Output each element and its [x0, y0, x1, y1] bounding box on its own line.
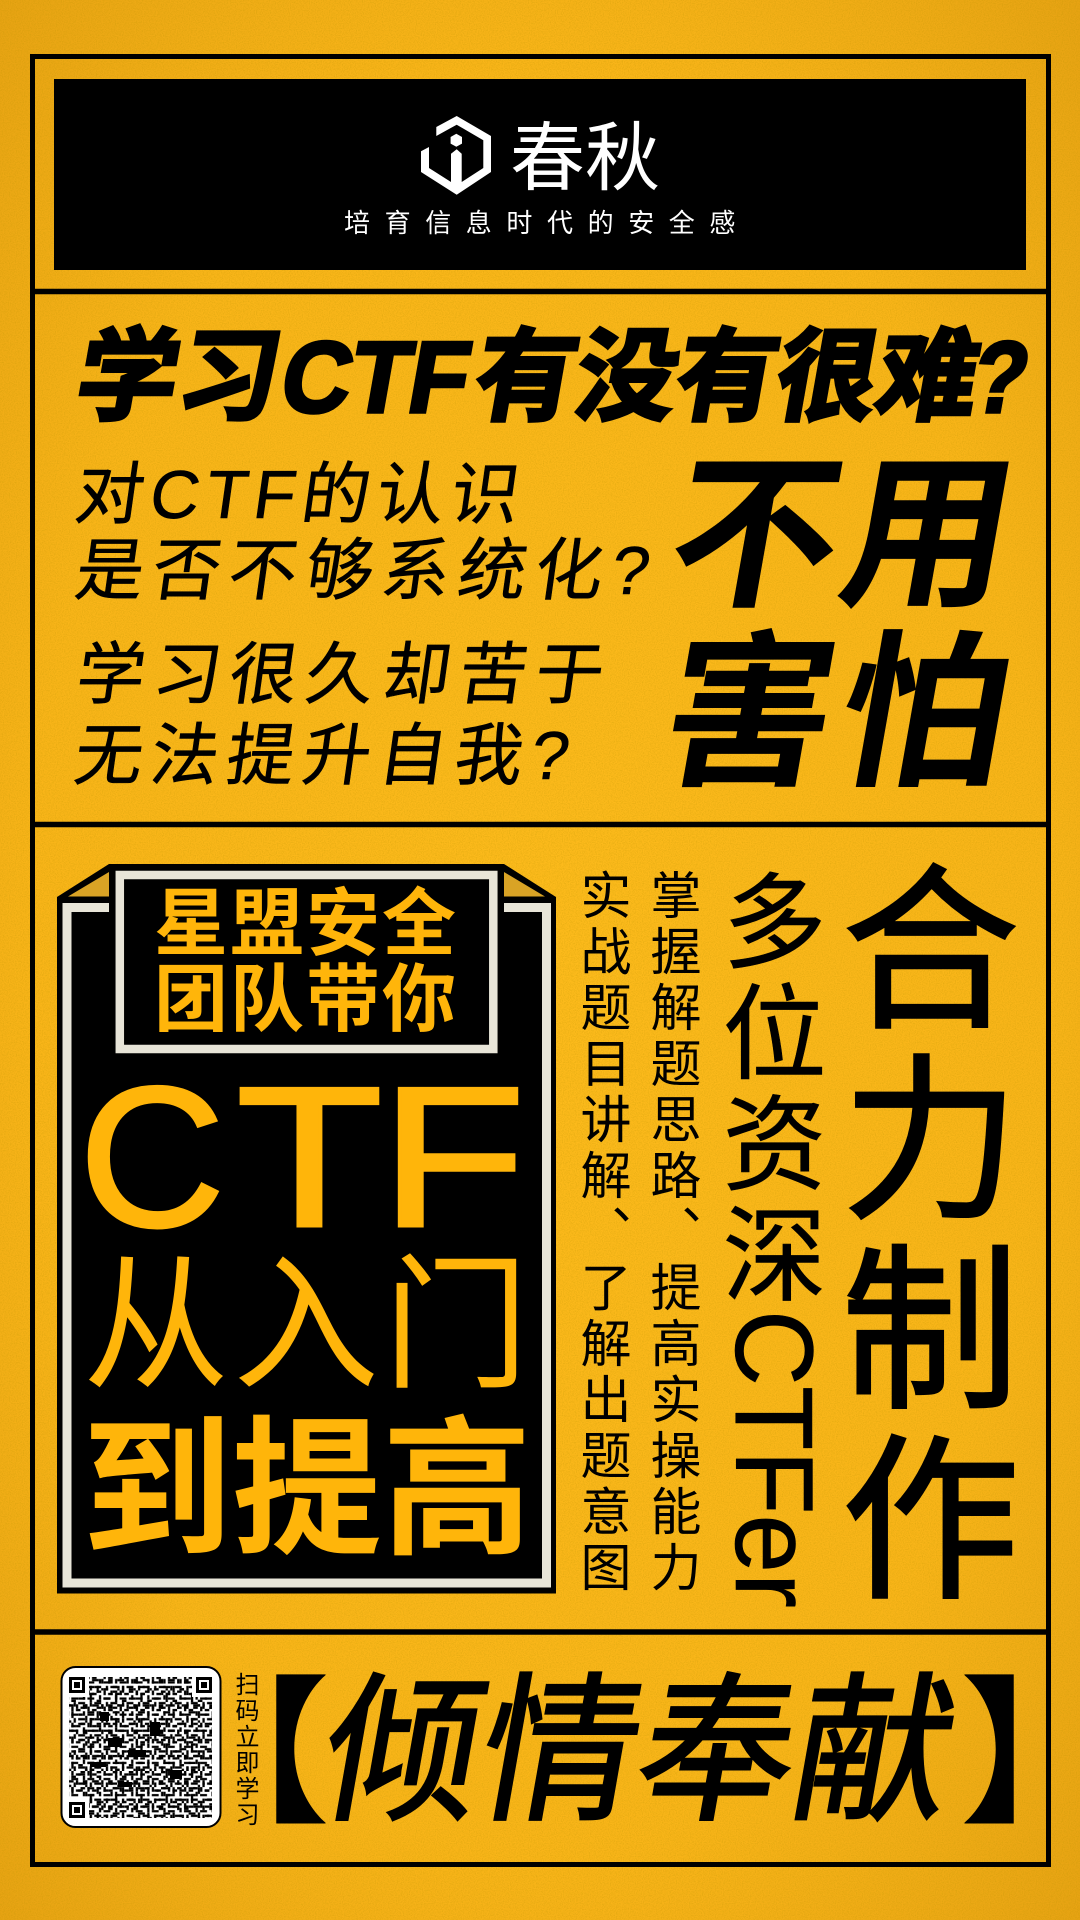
- slogan: do not fear: 害怕: [650, 620, 1033, 808]
- column: made together: 合力制作: [816, 857, 1015, 1617]
- big CTF: F: [380, 1046, 526, 1269]
- question block 1: 对CTF的认识: [71, 457, 531, 533]
- column: senior players: 多位资深: [706, 868, 822, 1312]
- question block 1: [71, 457, 663, 609]
- QR modules: [69, 1677, 212, 1818]
- tagline: 培育信息时代的安全感: [344, 208, 750, 238]
- big CTF: C: [79, 1046, 225, 1269]
- bracketed slogan: [172, 1663, 1080, 1843]
- big CTF: [79, 1046, 526, 1269]
- title: 有没有很难: [466, 321, 989, 434]
- card cream border: [67, 908, 546, 1583]
- fold triangles: [68, 872, 545, 896]
- logo wordmark: 春秋: [510, 116, 660, 200]
- column: solving skills: 掌握解题思路、提高实操能力: [643, 869, 700, 1597]
- question block 2: 无法提升自我?: [70, 718, 582, 794]
- from entry: 从入门: [83, 1244, 533, 1407]
- scan to learn: 扫码立即学习: [231, 1672, 258, 1828]
- slogan: do not fear: [650, 441, 1033, 808]
- header banner: [54, 79, 1026, 270]
- card tab: [109, 864, 504, 1060]
- question block 2: [70, 637, 617, 794]
- CTFer rotated text: CTFer: [712, 1310, 835, 1608]
- tab text: 团队带你: [154, 958, 458, 1041]
- slogan: do not fear: 不用: [656, 441, 1033, 629]
- tab text: 星盟安全: [154, 882, 458, 965]
- question block 1: 是否不够系统化?: [71, 533, 663, 609]
- big CTF: T: [236, 1046, 383, 1269]
- slogan text: 倾情奉献: [310, 1663, 969, 1842]
- logo: hexagon i mark: [421, 116, 491, 195]
- title: 学习: [68, 321, 290, 434]
- title: [68, 321, 1038, 434]
- QR finder patterns: [67, 1675, 214, 1820]
- tab text: [154, 882, 458, 1041]
- bracket left: 【: [172, 1667, 330, 1843]
- to advanced: 到提高: [82, 1406, 532, 1574]
- title: ?: [964, 321, 1038, 434]
- card folded outline: [57, 864, 556, 1594]
- question block 2: 学习很久却苦于: [72, 637, 617, 713]
- column: real problems: 实战题目讲解、了解出题意图: [573, 869, 630, 1597]
- title: CTF: [273, 321, 479, 434]
- panel: course card: [57, 864, 556, 1594]
- QR code panel: [62, 1667, 220, 1827]
